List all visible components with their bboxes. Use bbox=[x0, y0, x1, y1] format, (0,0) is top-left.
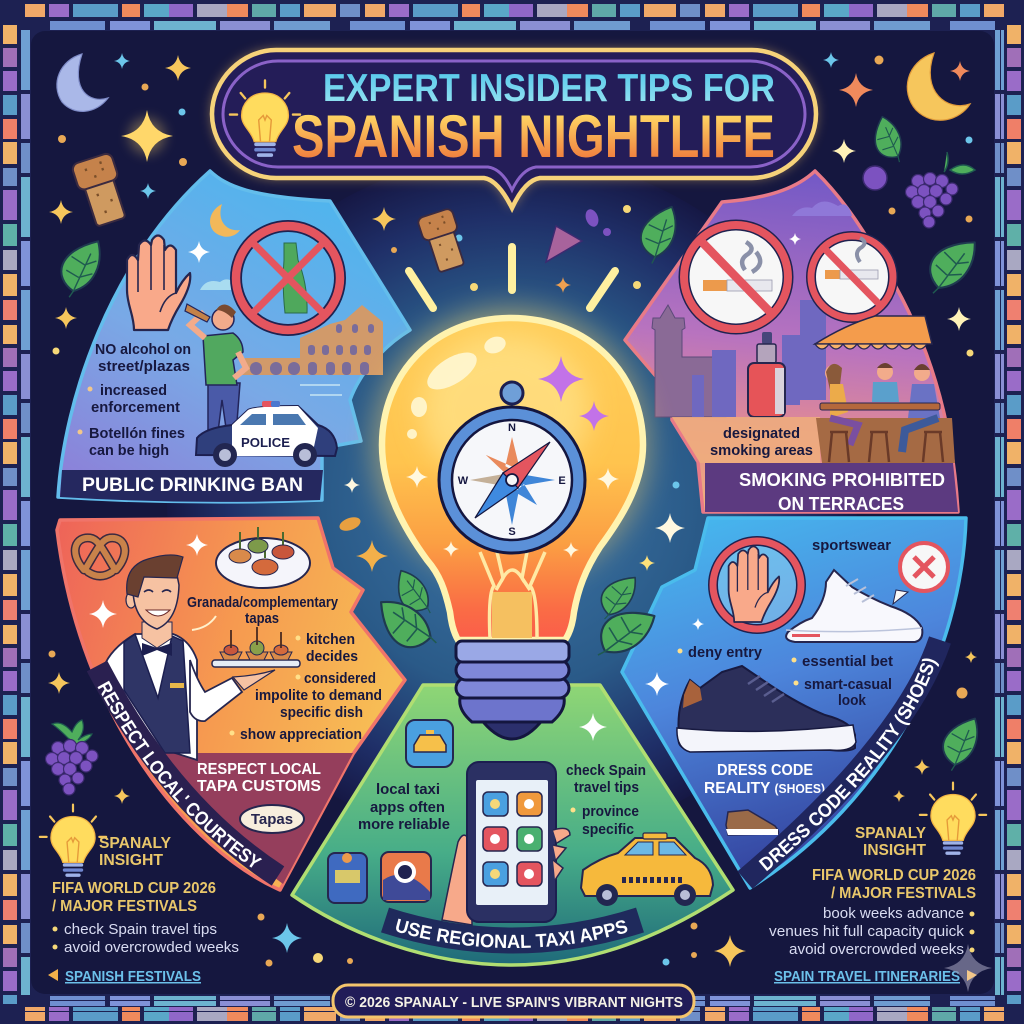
text: shoe tips: smart-casual bbox=[804, 676, 892, 693]
text: tapas tips: tapas bbox=[245, 610, 279, 627]
panel: use regional taxi apps bbox=[290, 683, 735, 967]
leaf right large bbox=[922, 231, 978, 302]
terrace scene bbox=[815, 316, 955, 463]
icon: vape device bbox=[748, 332, 785, 417]
icon: taxi app bbox=[406, 720, 453, 767]
icon: small no smoking sign bbox=[811, 236, 893, 318]
insight heading right bbox=[855, 825, 926, 859]
text: designated smoking areas: designated bbox=[723, 425, 800, 442]
icon: compass: S bbox=[508, 526, 516, 538]
insight heading left: SPANALY bbox=[99, 835, 171, 852]
text: shoe tips: sportswear bbox=[812, 537, 891, 554]
star bbox=[186, 534, 208, 556]
text: alcohol rules: NO alcohol on bbox=[95, 341, 191, 358]
leaves beside bulb base right bbox=[588, 570, 658, 671]
insight heading left bbox=[99, 835, 171, 869]
bullets right bbox=[769, 906, 974, 958]
insight right bbox=[769, 783, 992, 992]
sparkles in bulb bbox=[406, 356, 619, 558]
festivals heading left: FIFA WORLD CUP 2026 bbox=[52, 880, 216, 897]
footer pill: © 2026 SPANALY - LIVE SPAIN'S VIBRANT NIGHTS bbox=[345, 994, 683, 1011]
text: tapas tips: kitchen bbox=[306, 631, 355, 648]
curved banner: respect local courtesy: RESPECT LOCAL' COURTESY bbox=[98, 680, 262, 868]
inner pale glow bbox=[420, 335, 590, 485]
crescent moon in panel bbox=[210, 204, 240, 237]
bullets right: venues hit full capacity quick bbox=[769, 924, 965, 940]
label: respect local tapa customs: RESPECT LOCAL bbox=[197, 761, 321, 778]
label: dress code reality (shoes) bbox=[704, 762, 825, 797]
star bbox=[89, 600, 117, 628]
panel: smoking prohibited on terraces bbox=[625, 171, 958, 514]
label bar: smoking bbox=[705, 463, 958, 514]
tapas badge: Tapas bbox=[251, 811, 293, 828]
grapes right bbox=[906, 152, 975, 228]
icon: map app bbox=[328, 853, 367, 903]
text: tapas tips: decides bbox=[306, 648, 358, 665]
text: tapas tips: impolite to demand bbox=[255, 687, 382, 704]
insight heading right: SPANALY bbox=[855, 825, 926, 842]
cloud bbox=[200, 279, 240, 290]
icon: white sneaker bbox=[786, 570, 922, 642]
icon: compass: W bbox=[458, 475, 469, 487]
festivals heading right: FIFA WORLD CUP 2026 bbox=[812, 867, 976, 884]
icon: title bulb bbox=[230, 80, 300, 157]
label bar: smoking: SMOKING PROHIBITED bbox=[739, 470, 945, 490]
leaves beside bulb base left bbox=[371, 568, 444, 655]
text: alcohol rules: enforcement bbox=[91, 399, 180, 416]
panel: respect local tapa customs bbox=[55, 516, 407, 892]
icon: compass: E bbox=[558, 475, 566, 487]
text: tapas tips: specific dish bbox=[280, 704, 363, 721]
highlights bbox=[407, 334, 508, 439]
icon: large no smoking sign bbox=[684, 225, 788, 329]
insight left bbox=[40, 805, 239, 985]
text: taxi tips right: specific bbox=[582, 821, 634, 838]
man drinking bbox=[185, 304, 246, 435]
label: respect local tapa customs: TAPA CUSTOMS bbox=[197, 778, 321, 795]
icon: stop hand bbox=[127, 236, 190, 330]
star in panel bbox=[789, 233, 801, 245]
text: tapas tips bbox=[187, 594, 382, 743]
text: alcohol rules: can be high bbox=[89, 442, 169, 459]
festivals heading left bbox=[52, 880, 216, 915]
festivals heading right bbox=[812, 867, 976, 902]
leaf right small bbox=[863, 115, 914, 168]
text: alcohol rules: increased bbox=[100, 382, 167, 399]
police car bbox=[196, 401, 337, 467]
bullets left: avoid overcrowded weeks bbox=[64, 940, 239, 956]
cork left bbox=[71, 152, 131, 228]
icon: tapas plate bbox=[216, 527, 310, 588]
purple pennant and drops bbox=[546, 207, 611, 262]
text: shoe tips: look bbox=[838, 692, 867, 709]
grapes left bbox=[46, 720, 98, 795]
icon: small brown shoe bbox=[726, 810, 779, 835]
title line 1: EXPERT INSIDER TIPS FOR bbox=[323, 67, 775, 110]
bulb base bbox=[456, 641, 569, 739]
light rays bbox=[409, 247, 615, 308]
taxi car bbox=[581, 833, 713, 906]
bullets right: avoid overcrowded weeks bbox=[789, 942, 964, 958]
hand and phone bbox=[442, 762, 570, 925]
text: shoe tips: essential bet bbox=[802, 653, 893, 670]
text: tapas tips: show appreciation bbox=[240, 726, 362, 743]
icon: tapas tray bbox=[212, 627, 300, 667]
smile arc bbox=[192, 616, 216, 630]
label bar: public drinking ban bbox=[60, 470, 323, 502]
label: dress code reality (shoes): REALITY (SHOES) bbox=[704, 780, 825, 797]
link: spanish festivals: SPANISH FESTIVALS bbox=[65, 968, 201, 985]
label bar: public drinking ban: PUBLIC DRINKING BAN bbox=[82, 475, 303, 496]
icon: compass: N bbox=[508, 422, 516, 434]
bullets left bbox=[52, 922, 239, 956]
leaf left bbox=[58, 237, 102, 301]
star bbox=[579, 713, 607, 741]
leaf centre bbox=[641, 207, 675, 264]
police car: POLICE bbox=[241, 436, 290, 450]
bulb glow bbox=[373, 307, 649, 583]
text: tapas tips: considered bbox=[304, 670, 376, 687]
icon: insight bulb left bbox=[40, 805, 106, 877]
star in panel bbox=[188, 241, 210, 263]
icon: compass bbox=[439, 382, 585, 553]
waiter bbox=[102, 555, 275, 760]
icon: pretzel bbox=[75, 538, 125, 576]
icon: no hand sign bbox=[713, 541, 801, 629]
text: taxi tips left bbox=[358, 781, 450, 833]
cloud bbox=[792, 201, 852, 216]
bullets right: book weeks advance bbox=[823, 906, 964, 922]
tapas badge bbox=[240, 805, 304, 833]
text: taxi tips left: local taxi bbox=[376, 781, 440, 798]
city silhouette bbox=[652, 300, 826, 417]
curved banner: use regional taxi apps: USE REGIONAL TAXI APPS bbox=[396, 918, 628, 948]
filament bbox=[480, 552, 545, 638]
icon: no bottle sign bbox=[236, 226, 340, 330]
glass bbox=[382, 318, 643, 640]
text: designated smoking areas bbox=[710, 425, 813, 459]
label: respect local tapa customs bbox=[197, 761, 321, 795]
moon left bbox=[57, 54, 108, 111]
text: taxi tips right: travel tips bbox=[574, 779, 639, 796]
text: tapas tips: Granada/complementary bbox=[187, 594, 339, 611]
icon: red x speech bubble bbox=[893, 543, 948, 604]
curved banner: dress code reality (shoes): DRESS CODE REALITY (SHOES) bbox=[758, 658, 940, 872]
plum bbox=[863, 166, 887, 190]
text: shoe tips: deny entry bbox=[688, 644, 763, 661]
link: spain travel itineraries: SPAIN TRAVEL ITINERARIES bbox=[774, 968, 960, 985]
title line 2: SPANISH NIGHTLIFE bbox=[292, 103, 775, 170]
moon right bbox=[907, 53, 970, 120]
insight heading left: INSIGHT bbox=[99, 852, 163, 869]
footer pill bbox=[333, 985, 694, 1017]
label bar: smoking: ON TERRACES bbox=[778, 494, 904, 514]
city skyline bbox=[240, 305, 383, 395]
insight heading right: INSIGHT bbox=[863, 842, 926, 859]
text: alcohol rules: street/plazas bbox=[98, 358, 190, 375]
icon: dark sneaker bbox=[677, 666, 856, 752]
title banner bbox=[212, 50, 816, 208]
text: taxi tips left: more reliable bbox=[358, 816, 450, 833]
text: taxi tips left: apps often bbox=[370, 799, 445, 816]
central light bulb bbox=[373, 247, 649, 739]
festivals heading right: / MAJOR FESTIVALS bbox=[831, 885, 976, 902]
panel: public drinking ban bbox=[58, 171, 410, 502]
panel: dress code reality bbox=[620, 516, 968, 890]
leaf lower right bbox=[941, 716, 978, 773]
floor bbox=[672, 417, 820, 463]
text: designated smoking areas: smoking areas bbox=[710, 442, 813, 459]
stars bbox=[645, 618, 704, 696]
link: spain travel itineraries bbox=[774, 944, 992, 992]
text: taxi tips right bbox=[566, 762, 646, 838]
label: dress code reality (shoes): DRESS CODE bbox=[717, 762, 813, 779]
cork centre bbox=[417, 208, 469, 274]
icon: pin app bbox=[381, 852, 431, 902]
text: shoe tips bbox=[678, 537, 893, 709]
bullets left: check Spain travel tips bbox=[64, 922, 217, 938]
coin bbox=[338, 515, 362, 533]
text: taxi tips right: check Spain bbox=[566, 762, 646, 779]
maroon lower section bbox=[165, 753, 353, 884]
text: alcohol rules: Botellón fines bbox=[89, 425, 185, 442]
text: alcohol rules bbox=[78, 341, 191, 459]
icon: insight bulb right bbox=[920, 783, 986, 855]
text: taxi tips right: province bbox=[582, 803, 639, 820]
festivals heading left: / MAJOR FESTIVALS bbox=[52, 898, 197, 915]
